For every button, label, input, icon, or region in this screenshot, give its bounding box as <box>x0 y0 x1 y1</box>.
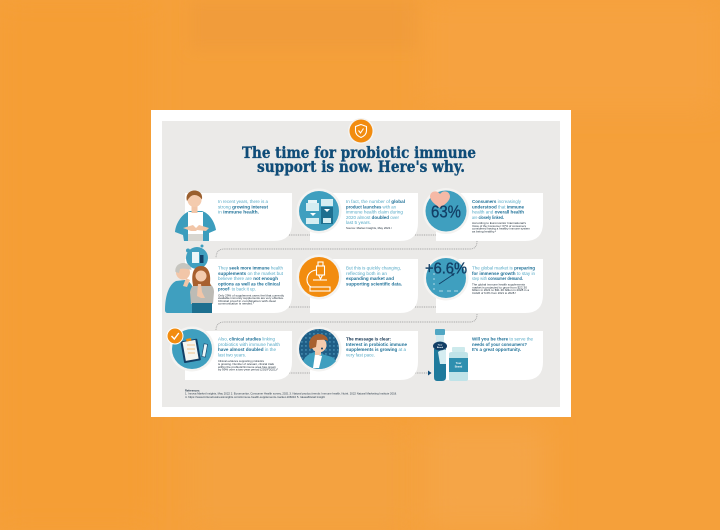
text: global product launches: Source: Market Insights, May 2022.¹ <box>346 226 392 230</box>
text: growing interest: strong growing interest <box>218 204 268 209</box>
text: clinical studies: is growing. Number of relevant, clinical trials <box>218 362 275 366</box>
connector dotted lines <box>216 235 477 376</box>
text: clinical studies <box>218 336 280 372</box>
text: 63 percent: as being healthy.² <box>472 229 496 233</box>
panel: quickly changing <box>296 254 418 313</box>
text: 63 percent <box>472 199 531 233</box>
references <box>185 390 397 399</box>
text: 63 percent: health and overall health <box>472 210 524 214</box>
illustration: product bottles: Brand <box>437 347 444 349</box>
text: the message is clear: very fast pace. <box>346 352 375 357</box>
text: seek more immune supplements: available immunity supplements are very effective. <box>218 296 284 300</box>
text: global product launches: 2020 almost doubled over <box>346 215 399 220</box>
text: global product launches: product launches with an <box>346 204 396 209</box>
text: global market growth: for immense growth to stay in <box>472 271 535 276</box>
illustration: product bottles: Your <box>456 361 461 365</box>
text: global product launches: immune health claim during <box>346 210 403 214</box>
title: support is now. Here's why. <box>257 157 465 176</box>
text: 63 percent: According to Euromonitor International's <box>472 221 527 225</box>
text: will you be there: It's a great opportunity. <box>472 347 521 352</box>
text: global product launches: In fact, the number of global <box>346 199 405 204</box>
icon: shield badge <box>348 118 374 144</box>
title: The time for probiotic immune <box>242 143 476 162</box>
text: clinical studies: Clinical evidence supporting probiotics <box>218 359 265 363</box>
text: 63 percent: are closely linked. <box>472 215 504 220</box>
text: global market growth: The global immune health supplements <box>472 282 526 286</box>
text: global product launches <box>346 199 405 230</box>
panel: global market growth <box>424 256 543 313</box>
stat: +6.6% chart: +6.6% <box>425 260 467 278</box>
text: seek more immune supplements: believe there are not enough <box>218 276 278 281</box>
text: seek more immune supplements: proof¹ to back it up. <box>218 286 256 292</box>
text: quickly changing: expanding market and <box>346 276 394 281</box>
text: seek more immune supplements: supplements on the market but <box>218 271 284 276</box>
text: 63 percent: Consumers increasingly <box>472 199 522 204</box>
text: 63 percent: considered having a healthy immune system <box>472 227 531 231</box>
panel: the message is clear <box>296 326 418 380</box>
illustration: two people thinking <box>165 244 214 313</box>
text: global market growth: billion in 2021 to $31.30 billion in 2028 in a <box>472 288 529 292</box>
icon: supplement bottles <box>296 188 342 234</box>
text: 63 percent: Voice of the Consumer: 67% of consumers <box>472 224 527 228</box>
text: will you be there: needs of your consumers? <box>472 342 527 347</box>
references: 4. https://www.fortunebusinessinsights.com/immune-health-supplements-market-106010 5. Ideas2Retail Insight <box>185 396 325 399</box>
text: growing interest: In recent years, there is a <box>218 199 268 204</box>
text: clinical studies: within the probiotic/immune area has grown <box>218 365 276 369</box>
text: will you be there <box>472 336 533 352</box>
text: quickly changing: reflecting both in an <box>346 271 387 276</box>
text: seek more immune supplements: Clinical proof in combination with clear <box>218 299 276 303</box>
text: seek more immune supplements: options as well as the clinical <box>218 281 280 286</box>
text: clinical studies: probiotics with immune health <box>218 342 280 347</box>
illustration: product bottles: Your <box>438 344 443 346</box>
text: 63 percent: understood that immune <box>472 204 524 209</box>
text: clinical studies: Also, clinical studies linking <box>218 336 275 342</box>
text: quickly changing: But this is quickly changing, <box>346 266 401 270</box>
text: global market growth <box>472 266 535 295</box>
text: seek more immune supplements: They seek more immune health <box>218 266 283 270</box>
panel: global product launches <box>296 188 418 241</box>
text: the message is clear: The message is clear: <box>346 336 391 342</box>
panel: growing interest <box>175 190 292 241</box>
stat: 63% with heart: 63% <box>431 202 461 222</box>
title <box>242 143 476 176</box>
text: growing interest: in immune health. <box>218 210 259 214</box>
panel: clinical studies <box>166 326 292 380</box>
text: clinical studies: by 99% over a two-year period (2019-2021)⁴ <box>218 368 279 372</box>
text: quickly changing <box>346 266 402 286</box>
panel: will you be there <box>433 329 543 381</box>
text: quickly changing: supporting scientific data. <box>346 281 402 286</box>
text: global market growth: CAGR of 6.6% from 2021 to 2028.³ <box>472 291 516 295</box>
illustration: person making heart <box>175 190 216 241</box>
references: References: <box>185 390 200 392</box>
text: the message is clear <box>346 336 407 357</box>
text: the message is clear: Interest in probiotic immune <box>346 342 407 347</box>
text: seek more immune supplements: communication is needed.⁵ <box>218 302 254 306</box>
text: clinical studies: have almost doubled in the <box>218 347 276 352</box>
panel: 63 percent <box>423 188 543 241</box>
text: global product launches: last 5 years. <box>346 220 371 225</box>
illustration: product bottles <box>433 329 468 381</box>
text: seek more immune supplements <box>218 266 285 306</box>
text: global market growth: market is projected to grow from $22.30 <box>472 285 527 289</box>
text: global market growth: step with consumer demand. <box>472 276 523 281</box>
text: global market growth: The global market is preparing <box>472 266 535 270</box>
illustration: portrait <box>296 326 342 372</box>
references: 1. Innova Market Insights, May 2022 2. Euromonitor, Consumer Health survey, 2021 3. Natural product trends: Immune health, Nutrit. 2022 Natural Marketing Institute 2018. <box>185 393 397 396</box>
text: will you be there: Will you be there to serve the <box>472 336 533 342</box>
illustration: clipboard with check badge <box>166 326 214 372</box>
text: the message is clear: supplements is growing at a <box>346 347 406 352</box>
grey panel <box>162 121 560 407</box>
text: seek more immune supplements: Only 29% of supplement users feel that currently <box>218 293 285 297</box>
text: clinical studies: last two years. <box>218 352 246 357</box>
illustration: product bottles: Brand <box>455 364 463 368</box>
infographic white card <box>151 110 571 417</box>
panel: seek more immune supplements <box>165 244 292 313</box>
text: growing interest <box>218 199 268 214</box>
icon: microscope <box>296 254 342 300</box>
